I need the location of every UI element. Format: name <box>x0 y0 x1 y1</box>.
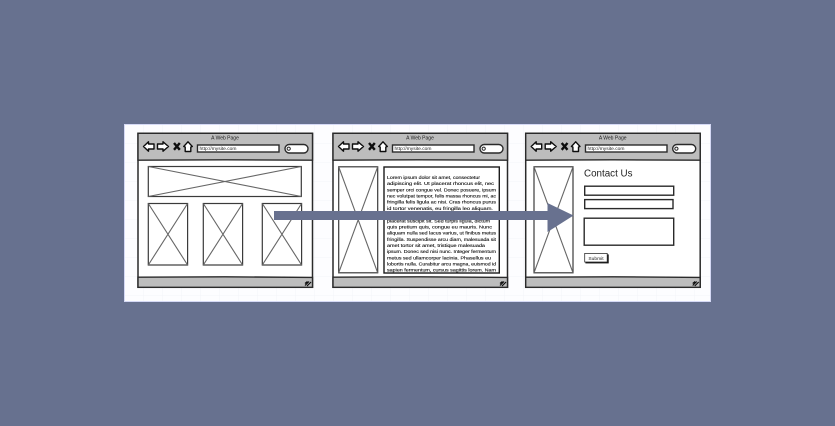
lorem ipsum text block: semper orci congue vel. Donec posuere, ipsum <box>387 187 496 193</box>
name input <box>585 186 674 195</box>
icon: forward arrow <box>545 142 556 151</box>
icon: resize grip <box>305 282 311 286</box>
search box <box>285 144 308 153</box>
icon: back arrow <box>531 142 542 151</box>
address bar: http://mysite.com <box>588 146 624 152</box>
submit button: Submit <box>588 256 604 262</box>
icon: home <box>379 142 387 152</box>
lorem ipsum text block: nec volutpat tempor, felis massa rhoncus mi, ac <box>387 194 497 200</box>
page title: A Web Page <box>211 136 239 142</box>
lorem ipsum text block: fringilla felis ligula ac nisi. Cras rhoncus purus <box>387 200 497 206</box>
lorem ipsum text block: fringilla. Suspendisse arcu diam, malesuada sit <box>387 237 497 243</box>
status bar <box>138 277 312 287</box>
wireframe 2: text page <box>333 133 508 287</box>
toolbar <box>526 133 700 160</box>
icon: stop <box>174 143 180 150</box>
page title: A Web Page <box>599 136 627 142</box>
status bar <box>333 277 508 287</box>
browser frame <box>333 133 508 287</box>
lorem ipsum text block: metus sed ullamcorper lacinia. Phasellus eu <box>387 255 491 261</box>
icon: stop <box>562 143 568 150</box>
tall image placeholder <box>534 167 573 273</box>
search box <box>480 144 503 153</box>
lorem ipsum text block: quis pretium quis, congue eu mauris. Nunc <box>387 224 493 230</box>
image placeholder 1 <box>148 204 188 265</box>
toolbar <box>138 133 312 160</box>
lorem ipsum text block: id tortor venenatis, eu fringilla leo aliquam. <box>387 206 493 212</box>
icon: forward arrow <box>158 142 168 151</box>
browser frame <box>526 133 700 287</box>
lorem ipsum text block: Lorem ipsum dolor sit amet, consectetur <box>387 175 480 181</box>
status bar <box>526 277 700 287</box>
submit button <box>585 253 609 263</box>
email input <box>585 200 673 209</box>
address bar <box>392 145 474 152</box>
lorem ipsum text block: lobortis nulla. Curabitur arcu magna, euismod id <box>387 262 496 268</box>
icon: resize grip <box>693 282 699 286</box>
icon: resize grip <box>500 282 506 286</box>
wireframe 3: contact form page <box>526 133 700 287</box>
search box <box>673 144 696 153</box>
address bar <box>586 145 667 152</box>
lorem ipsum text block: amet tortor sit amet, tristique malesuada <box>387 243 485 249</box>
icon: home <box>571 142 580 152</box>
icon: home <box>184 142 192 152</box>
icon: back arrow <box>144 142 154 151</box>
page title: A Web Page <box>406 136 434 142</box>
lorem ipsum text block: sapien fermentum, cursus sagittis lorem. Nam <box>387 268 496 274</box>
lorem ipsum text block <box>384 167 499 274</box>
lorem ipsum text block: placerat suscipit sit. Sed turpis ligula, dictum <box>387 218 490 224</box>
address bar: http://mysite.com <box>200 146 236 152</box>
icon: forward arrow <box>352 142 364 151</box>
lorem ipsum text block: ipsum. Donec sed nisi nunc. Integer fermentum <box>387 249 496 255</box>
address bar <box>198 145 279 152</box>
address bar: http://mysite.com <box>394 146 431 152</box>
white canvas panel <box>124 124 711 302</box>
image placeholder 2 <box>203 204 243 265</box>
contact heading: Contact Us <box>584 168 632 180</box>
toolbar <box>333 133 508 160</box>
message textarea <box>584 218 674 245</box>
wireframe 1: image gallery page <box>138 133 312 287</box>
arrow: flow from first to last page <box>274 203 574 232</box>
icon: stop <box>369 143 375 150</box>
lorem ipsum text block: aliquam nulla sed lacus varius, ut finibus metus <box>387 231 497 237</box>
tall image placeholder <box>339 167 378 273</box>
banner image placeholder <box>148 166 301 196</box>
lorem ipsum text block: adipiscing elit. Ut placerat rhoncus elit, nec <box>387 181 495 187</box>
image placeholder 3 <box>262 204 302 265</box>
icon: back arrow <box>338 142 349 151</box>
browser frame <box>138 133 312 287</box>
